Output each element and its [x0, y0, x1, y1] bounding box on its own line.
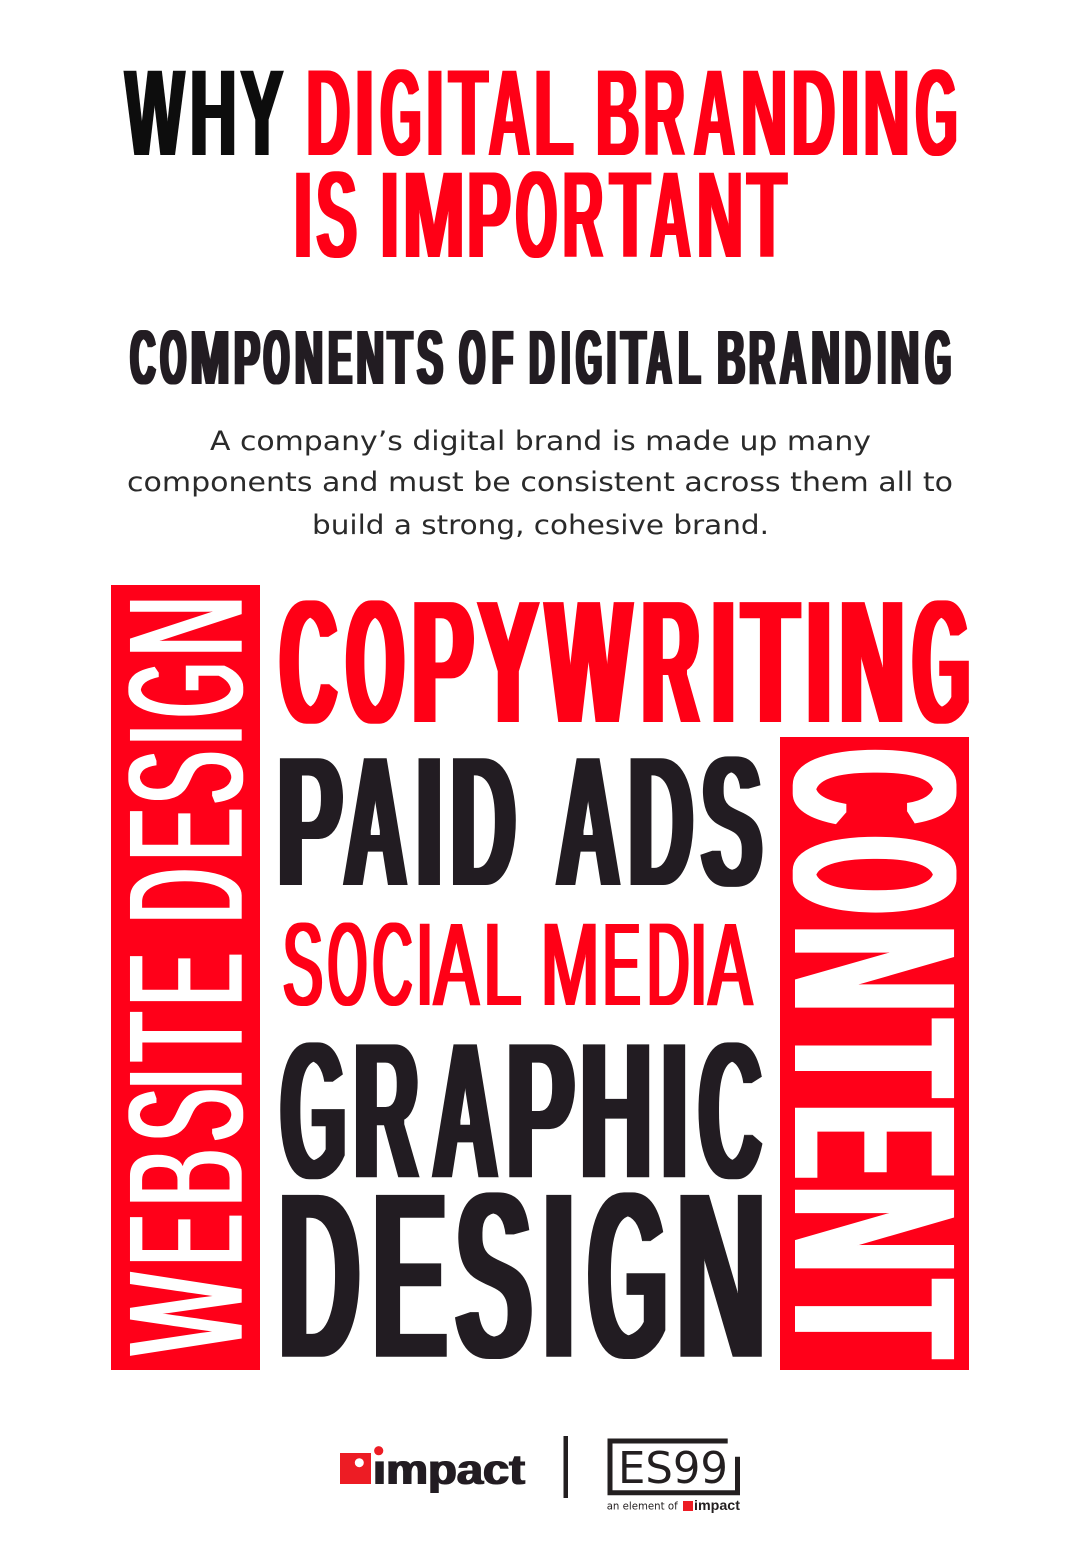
- title: Y: [240, 44, 284, 183]
- subheading: N: [295, 315, 323, 401]
- panel: content: [742, 737, 1007, 1370]
- subheading: I: [607, 315, 616, 401]
- divider line: [564, 1436, 568, 1498]
- title: O: [516, 146, 557, 285]
- word: graphic: H: [580, 1000, 652, 1222]
- word: graphic: G: [281, 1000, 346, 1222]
- title: N: [863, 44, 910, 183]
- title: R: [563, 146, 603, 285]
- word: copywriting: O: [347, 562, 404, 763]
- subheading: A: [780, 315, 806, 401]
- title: I: [840, 44, 860, 183]
- panel: website design: E: [96, 1214, 277, 1265]
- word: copywriting: R: [642, 562, 699, 763]
- title: A: [489, 44, 530, 183]
- panel: content: N: [742, 925, 1007, 1012]
- word: design: N: [676, 1142, 766, 1411]
- word: copywriting: T: [743, 562, 798, 763]
- panel: website design: W: [96, 1273, 277, 1354]
- word: graphic: R: [354, 1000, 419, 1222]
- word: copywriting: I: [712, 562, 735, 763]
- panel: website design: I: [96, 1067, 277, 1090]
- word: paid ads: A: [556, 716, 620, 928]
- text: S: [701, 716, 762, 928]
- subheading: B: [718, 315, 745, 401]
- title: [125, 44, 958, 285]
- title: A: [694, 44, 735, 183]
- panel: website design: T: [96, 1012, 277, 1061]
- title: D: [792, 44, 835, 183]
- title: I: [294, 146, 312, 285]
- word: social media: L: [484, 899, 519, 1031]
- title: L: [534, 44, 572, 183]
- subheading: L: [678, 315, 700, 401]
- word: social media: S: [283, 899, 323, 1031]
- subheading: E: [328, 315, 352, 401]
- word: social media: C: [373, 899, 412, 1031]
- subheading: D: [845, 315, 870, 401]
- logo: ES99: an element of: [607, 1500, 679, 1512]
- panel: content: N: [742, 1186, 1007, 1272]
- description text: A company’s digital brand is made up many: [210, 426, 871, 457]
- word: design: D: [278, 1142, 360, 1411]
- word: social media: A: [709, 899, 752, 1031]
- title: I: [355, 44, 374, 183]
- subheading: C: [130, 315, 155, 401]
- title: T: [747, 146, 787, 285]
- word: paid ads: D: [629, 716, 693, 928]
- word: graphic: A: [433, 1000, 498, 1222]
- word: design: [278, 1142, 766, 1411]
- panel: website design: E: [96, 953, 277, 1006]
- logo: ES99: ES99: [618, 1444, 728, 1494]
- panel: website design: N: [96, 596, 277, 657]
- word: design: G: [588, 1142, 668, 1411]
- word: graphic: P: [506, 1000, 574, 1222]
- subheading: R: [749, 315, 775, 401]
- word: social media: M: [541, 899, 599, 1031]
- description text: [127, 426, 953, 541]
- title: T: [610, 146, 650, 285]
- title: M: [403, 146, 465, 285]
- panel: website design: [96, 585, 277, 1370]
- title: G: [380, 44, 422, 183]
- word: paid ads: D: [451, 716, 516, 928]
- word: paid ads: I: [416, 716, 442, 928]
- word: paid ads: A: [344, 716, 407, 928]
- panel: website design: S: [96, 1088, 277, 1142]
- subheading: M: [190, 315, 230, 401]
- subheading: I: [562, 315, 570, 401]
- subheading: D: [529, 315, 554, 401]
- title: T: [449, 44, 488, 183]
- word: copywriting: N: [840, 562, 904, 763]
- subheading: P: [234, 315, 260, 401]
- subheading: A: [647, 315, 671, 401]
- title: R: [644, 44, 685, 183]
- panel: website design: B: [96, 1149, 277, 1207]
- subheading: O: [460, 315, 485, 401]
- subheading: F: [492, 315, 513, 401]
- text: G: [913, 562, 969, 763]
- description text: build a strong, cohesive brand.: [312, 510, 769, 541]
- panel: website design: D: [96, 869, 277, 923]
- subheading: O: [264, 315, 289, 401]
- panel: website design: G: [96, 662, 277, 717]
- word: social media: [283, 899, 752, 1031]
- word: copywriting: [280, 562, 969, 763]
- subheading: O: [160, 315, 186, 401]
- panel: website design: I: [96, 724, 277, 746]
- word: design: E: [372, 1142, 447, 1411]
- subheading: T: [388, 315, 412, 401]
- title: N: [741, 44, 787, 183]
- word: design: S: [455, 1142, 532, 1411]
- subheading: S: [417, 315, 443, 401]
- title: B: [596, 44, 640, 183]
- word: social media: E: [603, 899, 640, 1031]
- word: copywriting: C: [280, 562, 337, 763]
- title: I: [426, 44, 444, 183]
- title: S: [316, 146, 357, 285]
- subheading: I: [878, 315, 885, 401]
- word: copywriting: W: [546, 562, 631, 763]
- word: social media: D: [647, 899, 689, 1031]
- word: social media: O: [328, 899, 367, 1031]
- word: design: I: [542, 1142, 575, 1411]
- panel: content: E: [742, 1104, 1007, 1178]
- subheading: N: [357, 315, 384, 401]
- title: A: [650, 146, 691, 285]
- word: social media: A: [434, 899, 479, 1031]
- subheading: G: [576, 315, 602, 401]
- description text: components and must be consistent across them all to: [127, 467, 953, 498]
- word: paid ads: [277, 716, 762, 928]
- title: N: [697, 146, 743, 285]
- logo: impact: impact: [373, 1446, 525, 1494]
- panel: website design: S: [96, 751, 277, 804]
- word: copywriting: P: [412, 562, 473, 763]
- logo: ES99: impact: [694, 1497, 740, 1513]
- title: D: [306, 44, 350, 183]
- word: paid ads: P: [277, 716, 342, 928]
- word: social media: I: [416, 899, 433, 1031]
- title: W: [125, 44, 184, 183]
- text: G: [926, 315, 951, 401]
- panel: content: T: [742, 1281, 1007, 1357]
- word: copywriting: I: [807, 562, 831, 763]
- subheading: T: [621, 315, 646, 401]
- subheading: N: [812, 315, 840, 401]
- panel: content: O: [742, 837, 1007, 913]
- panel: content: C: [742, 750, 1007, 824]
- word: social media: I: [690, 899, 707, 1031]
- panel: website design: E: [96, 808, 277, 860]
- subheading: N: [891, 315, 919, 401]
- title: P: [467, 146, 511, 285]
- title: I: [380, 146, 399, 285]
- logo: ES99: [607, 1441, 740, 1513]
- text: G: [916, 44, 958, 183]
- panel: content: T: [742, 1021, 1007, 1096]
- title: H: [190, 44, 237, 183]
- word: graphic: [281, 1000, 762, 1222]
- word: copywriting: Y: [478, 562, 539, 763]
- text: C: [699, 1000, 762, 1222]
- word: graphic: I: [662, 1000, 687, 1222]
- subheading: [130, 315, 951, 401]
